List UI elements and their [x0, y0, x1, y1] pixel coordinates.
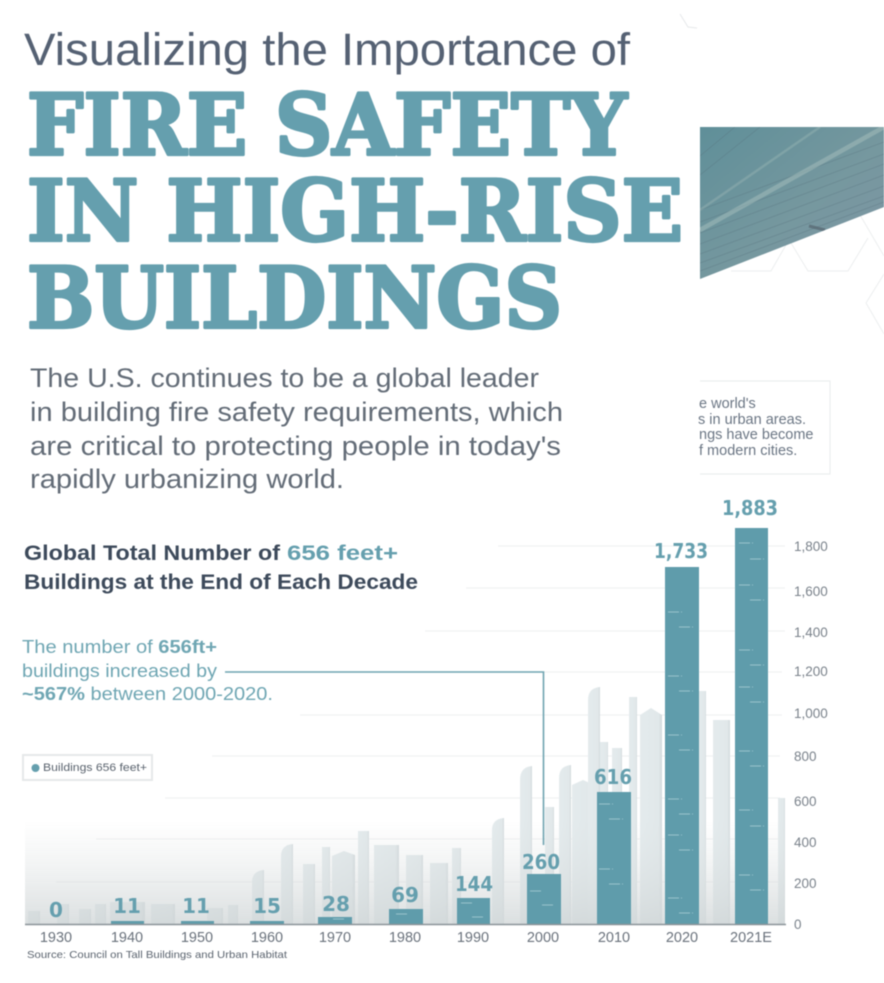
title [24, 24, 683, 348]
x axis labels: 1930 [40, 930, 72, 946]
callout arrow line [225, 672, 544, 845]
y axis labels [794, 539, 828, 932]
cropped side note box: f modern cities. [699, 443, 797, 459]
legend [23, 755, 152, 780]
gridlines [56, 546, 785, 882]
intro text block [30, 363, 563, 494]
x axis labels: 2010 [598, 930, 630, 946]
bar: 1940 [111, 921, 144, 924]
y axis labels: 400 [794, 835, 817, 850]
hexagon background pattern [731, 215, 884, 334]
y axis labels: 1,800 [794, 539, 828, 554]
y axis labels: 1,600 [794, 584, 828, 599]
annotation: ~567% between 2000-2020. [22, 684, 273, 704]
title line: fire safety: FIRE SAFETY [27, 76, 628, 174]
bar: 2010 [597, 792, 631, 924]
y axis labels: 200 [794, 876, 817, 891]
x axis labels: 1940 [111, 930, 143, 946]
annotation: buildings increased by [22, 661, 217, 681]
x axis labels: 1980 [389, 930, 421, 946]
value labels: 15 [253, 894, 281, 918]
value labels: 11 [113, 894, 141, 918]
chart title [24, 542, 418, 594]
bar: 2000 [527, 874, 561, 924]
cropped side note box [698, 381, 830, 474]
bars [111, 528, 768, 924]
bar: 1960 [250, 921, 284, 924]
value labels: 0 [49, 898, 63, 922]
chart title: 656 feet+ [287, 542, 398, 565]
bar: 1990 [457, 898, 490, 924]
chart title: Buildings at the End of Each Decade [24, 571, 418, 594]
value labels: 1,733 [654, 539, 708, 563]
intro text block: are critical to protecting people in today's [30, 431, 561, 461]
annotation: The number of 656ft+ [22, 637, 217, 657]
decorative corner mark [680, 14, 697, 28]
bar window details [333, 543, 766, 919]
value labels: 11 [182, 894, 210, 918]
photo: building facade [700, 127, 884, 279]
title line: intro: Visualizing the Importance of [24, 24, 631, 75]
title line: in high-rise: IN HIGH-RISE [27, 162, 683, 260]
x axis labels: 1950 [181, 930, 213, 946]
x axis labels: 2020 [666, 930, 698, 946]
value labels [49, 496, 778, 922]
chart title: Global Total Number of [24, 542, 281, 565]
value labels: 1,883 [722, 496, 778, 520]
x axis labels: 2021E [730, 930, 772, 946]
chart ground shading [25, 820, 785, 924]
x axis line [25, 924, 786, 926]
y axis labels: 0 [794, 917, 802, 932]
y axis labels: 1,200 [794, 664, 828, 679]
value labels: 69 [391, 883, 419, 907]
bar: 2021E [735, 528, 768, 924]
background skyline [28, 687, 785, 924]
title line: buildings: BUILDINGS [27, 248, 562, 348]
bar: 1970 [318, 917, 352, 924]
cropped side note box: s in urban areas. [698, 412, 806, 428]
x axis labels: 1970 [319, 930, 351, 946]
source: Source: Council on Tall Buildings and Urban Habitat [27, 949, 287, 961]
x axis labels: 1960 [251, 930, 283, 946]
x axis labels [40, 930, 772, 946]
intro text block: The U.S. continues to be a global leader [30, 363, 539, 393]
y axis labels: 600 [794, 794, 817, 809]
cropped side note box: ngs have become [699, 427, 813, 443]
value labels: 144 [455, 872, 493, 896]
intro text block: in building fire safety requirements, which [30, 397, 563, 427]
annotation [22, 637, 273, 704]
x axis labels: 1990 [457, 930, 489, 946]
value labels: 616 [594, 765, 632, 789]
value labels: 260 [522, 850, 560, 874]
x axis labels: 2000 [527, 930, 559, 946]
y axis labels: 800 [794, 749, 817, 764]
y axis labels: 1,000 [794, 706, 828, 721]
bar: 1950 [181, 921, 214, 924]
cropped side note box: e world's [699, 396, 756, 412]
bar: 2020 [665, 567, 699, 924]
legend: Buildings 656 feet+ [43, 762, 147, 774]
value labels: 28 [322, 892, 350, 916]
y axis labels: 1,400 [794, 625, 828, 640]
intro text block: rapidly urbanizing world. [30, 464, 344, 494]
bar: 1980 [389, 909, 423, 924]
